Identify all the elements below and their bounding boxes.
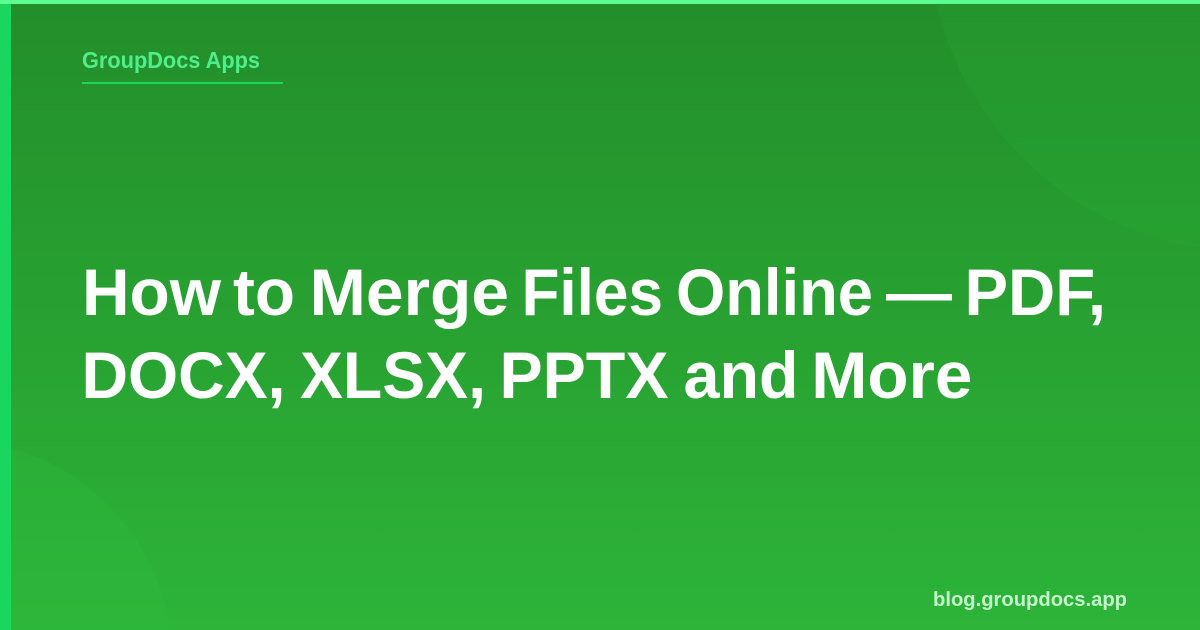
title line 2: DOCX, (82, 338, 286, 412)
title line 1: Files (522, 255, 663, 329)
decorative circle top right (936, 0, 1200, 248)
title line 1: How (82, 255, 222, 329)
title line 1: PDF, (964, 255, 1106, 329)
title line 2: PPTX (500, 338, 668, 412)
title line 2: and (684, 338, 798, 412)
title line 1 (82, 255, 1106, 329)
title line 1: Merge (310, 255, 509, 329)
brand label: GroupDocs Apps (82, 47, 260, 73)
left accent bar (0, 4, 11, 630)
title (82, 255, 1106, 412)
title line 2: More (811, 338, 972, 412)
top accent bar (0, 0, 1200, 4)
site url: blog.groupdocs.app (933, 589, 1127, 611)
title line 1: — (886, 255, 952, 329)
brand underline (82, 82, 283, 84)
title line 1: to (233, 255, 295, 329)
title line 2: XLSX, (300, 338, 486, 412)
decorative circle bottom left (0, 445, 170, 630)
title line 1: Online (676, 255, 873, 329)
title line 2 (82, 338, 972, 412)
